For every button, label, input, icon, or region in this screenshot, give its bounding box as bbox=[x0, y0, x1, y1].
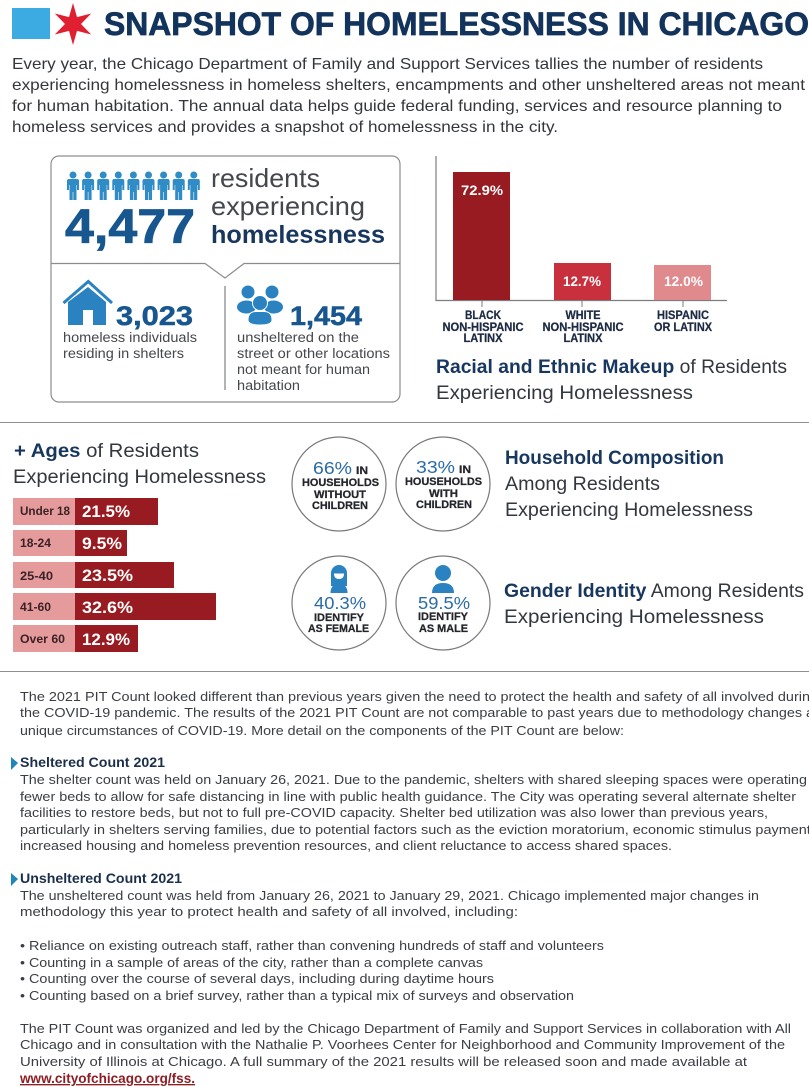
heading: racial and ethnic makeup: Racial and Ethnic Makeup of Residents bbox=[436, 356, 787, 378]
heading: household composition: Experiencing Homelessness bbox=[505, 499, 753, 521]
circle: 59.5% identify as male: AS MALE bbox=[419, 623, 468, 635]
heading: gender identity: Experiencing Homelessness bbox=[504, 606, 764, 628]
circle: 66% in households without children: HOUSEHOLDS bbox=[302, 477, 379, 489]
category labels: NON-HISPANIC bbox=[442, 322, 524, 334]
section: sheltered count: fewer beds to allow for safe distancing in line with public health guidance. The City was operating several alternate shelter bbox=[20, 789, 797, 804]
category labels: LATINX bbox=[564, 333, 603, 345]
bar: Hispanic or Latinx: 12.0% bbox=[664, 273, 704, 289]
category labels: LATINX bbox=[464, 333, 503, 345]
circle: 33% in households with children: HOUSEHOLDS bbox=[405, 476, 482, 488]
section: sheltered count: facilities to restore beds, but not to full pre-COVID capacity. Shelter bed utilization was also lower than previous years, bbox=[20, 805, 768, 820]
section: unsheltered count bbox=[11, 870, 759, 919]
heading: racial and ethnic makeup: Experiencing Homelessness bbox=[436, 382, 693, 404]
circle: 66% in households without children: WITHOUT bbox=[314, 489, 366, 501]
bar: Black non-Hispanic Latinx bbox=[453, 172, 510, 300]
section: sheltered count: particularly in shelters serving families, due to potential factors such as the eviction moratorium, economic stimulus payments, bbox=[20, 822, 809, 837]
circle: 33% in households with children: WITH bbox=[429, 488, 458, 500]
bar: 25-40: 23.5% bbox=[82, 566, 133, 585]
sheltered description: homeless individuals bbox=[63, 330, 197, 345]
section: unsheltered count: The unsheltered count was held from January 26, 2021 to January 29, 2021. Chicago implemented major changes in bbox=[20, 888, 759, 903]
total label: residents bbox=[211, 163, 320, 193]
icon: female person bbox=[330, 565, 348, 593]
category labels: WHITE bbox=[566, 310, 601, 322]
text block: closing paragraph: University of Illinois at Chicago. A full summary of the 2021 results will be released soon and made available at bbox=[20, 1054, 747, 1069]
sheltered number: 3,023 bbox=[116, 301, 193, 331]
heading: household composition: Household Composition bbox=[505, 447, 724, 469]
circle: 66% in households without children: IN bbox=[356, 465, 368, 477]
heading: household composition: Among Residents bbox=[505, 473, 660, 495]
icon: row of people bbox=[67, 172, 200, 200]
bullet list: methodology changes: • Counting over the course of several days, including during daytime hours bbox=[20, 971, 494, 986]
bar chart: ages bbox=[13, 498, 216, 652]
total label: experiencing bbox=[211, 191, 365, 221]
category labels: OR LATINX bbox=[654, 322, 712, 334]
intro paragraph: homeless services and provides a snapshot of homelessness in the city. bbox=[12, 119, 558, 136]
bar: 25-40: 25-40 bbox=[20, 571, 53, 583]
heading: racial and ethnic makeup bbox=[436, 356, 787, 404]
icon: group of people bbox=[237, 286, 283, 325]
heading: gender identity: Gender Identity Among Residents bbox=[504, 580, 804, 602]
text block: PIT count introduction bbox=[20, 689, 809, 738]
heading: ages: + Ages of Residents bbox=[14, 440, 199, 462]
section: sheltered count bbox=[11, 754, 809, 853]
bar: under 18: Under 18 bbox=[20, 506, 71, 518]
circle: 33% in households with children: 33% bbox=[416, 457, 455, 477]
sheltered description bbox=[63, 330, 197, 361]
heading: ages: Experiencing Homelessness bbox=[13, 466, 266, 488]
text block: closing paragraph: Chicago and in consultation with the Nathalie P. Voorhees Center for Neighborhood and Community Improvement of the bbox=[20, 1037, 785, 1052]
icon: house bbox=[64, 282, 112, 325]
text block: closing paragraph: www.cityofchicago.org/fss. bbox=[19, 1071, 195, 1086]
text block: PIT count introduction: the COVID-19 pandemic. The results of the 2021 PIT Count are not comparable to past years due to methodology changes and bbox=[20, 705, 809, 720]
bullet list: methodology changes bbox=[20, 938, 604, 1003]
category labels bbox=[442, 310, 712, 345]
icon: arrow marker bbox=[11, 757, 18, 770]
bar: White non-Hispanic Latinx bbox=[554, 263, 611, 300]
total label bbox=[211, 163, 385, 249]
circle: 59.5% identify as male bbox=[396, 556, 490, 650]
intro paragraph: for human habitation. The annual data helps guide federal funding, services and resource planning to bbox=[12, 98, 782, 115]
bar: over 60: Over 60 bbox=[20, 634, 65, 646]
text block: PIT count introduction: The 2021 PIT Count looked different than previous years given the need to protect the health and safety of all involved during bbox=[20, 689, 809, 704]
intro paragraph bbox=[12, 56, 806, 136]
circle: 66% in households without children bbox=[292, 437, 386, 531]
unsheltered description: unsheltered on the bbox=[237, 330, 359, 345]
bar: under 18: 21.5% bbox=[82, 502, 130, 521]
bullet list: methodology changes: • Counting based on a brief survey, rather than a typical mix of surveys and observation bbox=[20, 988, 574, 1003]
text block: PIT count introduction: unique circumstances of COVID-19. More detail on the components of the PIT Count are below: bbox=[20, 723, 624, 738]
heading: gender identity bbox=[504, 580, 804, 628]
section: sheltered count: The shelter count was held on January 26, 2021. Due to the pandemic, shelters with shared sleeping spaces were operating bbox=[20, 772, 807, 787]
text block: closing paragraph bbox=[19, 1021, 791, 1086]
section: sheltered count: increased housing and homeless prevention resources, and client reluctance to access shared spaces. bbox=[20, 838, 672, 853]
heading: household composition bbox=[505, 447, 753, 521]
category labels: BLACK bbox=[465, 310, 502, 322]
bar: 18-24 bbox=[13, 530, 127, 556]
bar: Black non-Hispanic Latinx: 72.9% bbox=[461, 182, 504, 198]
bullet list: methodology changes: • Reliance on existing outreach staff, rather than convening hundreds of staff and volunteers bbox=[20, 938, 604, 953]
bar: 25-40 bbox=[13, 562, 174, 588]
intro paragraph: Every year, the Chicago Department of Family and Support Services tallies the number of residents bbox=[12, 56, 763, 73]
bar: 41-60 bbox=[13, 593, 216, 620]
circle: 33% in households with children bbox=[396, 437, 490, 531]
bar: over 60: 12.9% bbox=[82, 630, 130, 649]
section: unsheltered count: methodology this year to protect health and safety of all involved, including: bbox=[20, 904, 518, 919]
bar: Hispanic or Latinx bbox=[654, 265, 711, 300]
section: unsheltered count: Unsheltered Count 2021 bbox=[20, 870, 182, 886]
unsheltered description: street or other locations bbox=[237, 346, 390, 361]
title: SNAPSHOT OF HOMELESSNESS IN CHICAGO bbox=[104, 6, 809, 42]
circle: 40.3% identify as female: 40.3% bbox=[314, 593, 366, 613]
text block: closing paragraph: The PIT Count was organized and led by the Chicago Department of Family and Support Services in collaboration with All bbox=[20, 1021, 791, 1036]
circle: 40.3% identify as female: IDENTIFY bbox=[314, 612, 365, 624]
circle: 33% in households with children: CHILDREN bbox=[416, 499, 472, 511]
heading: ages bbox=[13, 440, 266, 488]
unsheltered description: not meant for human bbox=[237, 362, 370, 377]
bar: 41-60: 41-60 bbox=[20, 602, 51, 614]
circle: 33% in households with children: IN bbox=[459, 464, 471, 476]
bar: 18-24: 18-24 bbox=[20, 538, 52, 550]
intro paragraph: experiencing homelessness in homeless shelters, encampments and other unsheltered areas not meant bbox=[12, 77, 806, 94]
sheltered description: residing in shelters bbox=[63, 346, 184, 361]
circle: 59.5% identify as male: IDENTIFY bbox=[418, 611, 469, 623]
circle: 66% in households without children: CHILDREN bbox=[312, 500, 368, 512]
bullet list: methodology changes: • Counting in a sample of areas of the city, rather than a complete canvas bbox=[20, 955, 483, 970]
unsheltered description bbox=[237, 330, 390, 393]
total number: 4,477 bbox=[65, 201, 195, 254]
icon: male person bbox=[432, 565, 454, 593]
category labels: NON-HISPANIC bbox=[542, 322, 624, 334]
unsheltered number: 1,454 bbox=[290, 301, 362, 331]
bar: 41-60: 32.6% bbox=[82, 598, 133, 617]
section: sheltered count: Sheltered Count 2021 bbox=[20, 754, 165, 770]
bar: White non-Hispanic Latinx: 12.7% bbox=[563, 273, 602, 289]
circle: 59.5% identify as male: 59.5% bbox=[418, 593, 470, 613]
category labels: HISPANIC bbox=[657, 310, 709, 322]
bar: 18-24: 9.5% bbox=[82, 534, 122, 553]
bar: under 18 bbox=[13, 498, 158, 525]
bar: over 60 bbox=[13, 625, 138, 652]
circle: 40.3% identify as female: AS FEMALE bbox=[308, 623, 369, 635]
unsheltered description: habitation bbox=[237, 378, 300, 393]
icon: arrow marker bbox=[11, 873, 18, 886]
total label: homelessness bbox=[211, 221, 385, 249]
panel: total residents experiencing homelessness bbox=[51, 156, 400, 402]
circle: 40.3% identify as female bbox=[292, 556, 386, 650]
header logo: blue square and red star bbox=[12, 3, 91, 45]
bar chart: racial and ethnic makeup bbox=[436, 156, 727, 345]
circle: 66% in households without children: 66% bbox=[313, 458, 352, 478]
